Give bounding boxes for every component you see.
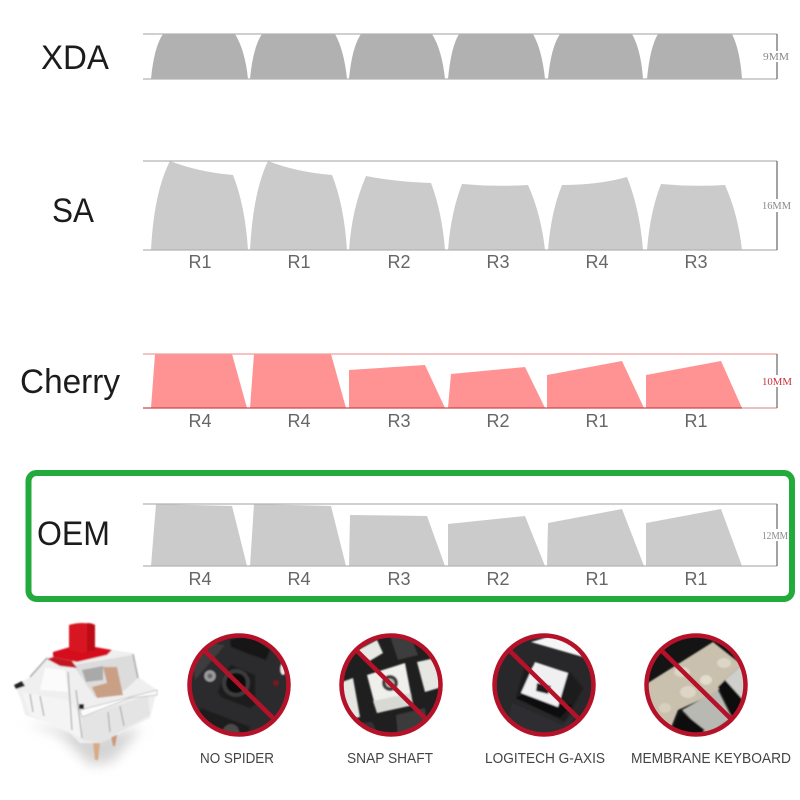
panel: XDA profile (41, 34, 789, 79)
row labels: SA: R1 (188, 252, 212, 272)
icon: g-axis photo with prohibition ring (490, 632, 600, 740)
row labels: OEM: R1 (585, 569, 609, 589)
panel: OEM profile highlighted (28, 473, 792, 599)
row labels: SA: R3 (684, 252, 708, 272)
row labels: Cherry: R1 (684, 411, 708, 431)
row labels: SA: R4 (585, 252, 609, 272)
dimension: 16MM: 16MM (762, 201, 791, 212)
row labels: Cherry: R3 (387, 411, 411, 431)
row labels: OEM: R3 (387, 569, 411, 589)
row labels: OEM: R2 (486, 569, 510, 589)
chart: SA keycaps (151, 161, 742, 250)
feature: snap shaft (338, 632, 444, 767)
row labels: SA (188, 252, 708, 272)
heading: SA: SA (52, 192, 94, 230)
heading: Cherry: Cherry (20, 363, 120, 401)
dimension: 12MM: 12MM (762, 531, 788, 542)
dimension: 10MM: 10MM (762, 377, 792, 388)
row labels: OEM (188, 569, 708, 589)
chart: OEM keycaps (151, 504, 742, 566)
panel: SA profile (52, 161, 791, 272)
row labels: OEM: R1 (684, 569, 708, 589)
icon: membrane photo with prohibition ring (640, 632, 750, 738)
row labels: Cherry: R1 (585, 411, 609, 431)
panel: Cherry profile (20, 354, 792, 431)
caption: no spider: NO SPIDER (200, 750, 274, 767)
caption: snap shaft: SNAP SHAFT (347, 750, 433, 767)
feature: no spider (185, 632, 295, 767)
row labels: Cherry (188, 411, 708, 431)
row labels: OEM: R4 (188, 569, 212, 589)
dimension: 9MM (143, 34, 789, 79)
row labels: OEM: R4 (287, 569, 311, 589)
row labels: SA: R1 (287, 252, 311, 272)
icon: red mechanical switch (14, 623, 157, 765)
feature: membrane keyboard (631, 632, 791, 767)
feature: logitech g-axis (485, 632, 605, 767)
chart: Cherry keycaps (151, 354, 742, 408)
caption: logitech g-axis: LOGITECH G-AXIS (485, 750, 605, 767)
icon: snap shaft photo with prohibition ring (338, 632, 444, 738)
heading: XDA: XDA (41, 39, 109, 77)
heading: OEM: OEM (37, 515, 110, 553)
row labels: Cherry: R4 (287, 411, 311, 431)
caption: membrane keyboard: MEMBRANE KEYBOARD (631, 750, 791, 767)
dimension: 16MM (143, 161, 791, 250)
dimension: 9MM: 9MM (763, 52, 789, 63)
green highlight frame (28, 473, 792, 599)
chart: XDA keycaps (151, 34, 742, 79)
dimension: 12MM (143, 504, 788, 566)
row labels: SA: R3 (486, 252, 510, 272)
row labels: Cherry: R4 (188, 411, 212, 431)
icon: no spider photo with prohibition ring (185, 632, 295, 740)
row labels: Cherry: R2 (486, 411, 510, 431)
row labels: SA: R2 (387, 252, 411, 272)
